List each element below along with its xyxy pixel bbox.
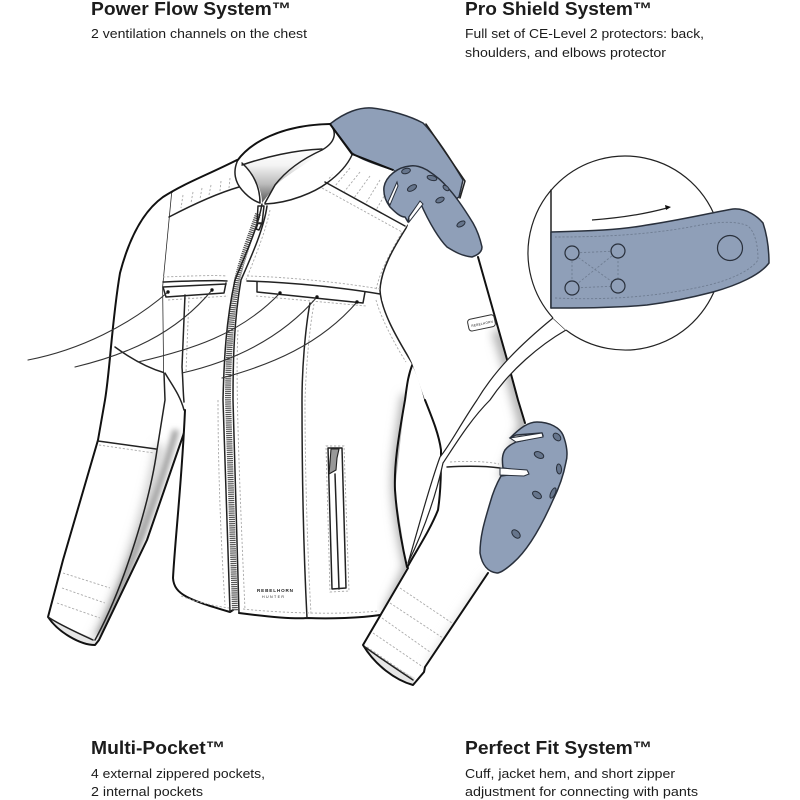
- lower pocket: [326, 446, 349, 592]
- feature: Perfect Fit System: [465, 738, 699, 799]
- feature: Multi-Pocket: 4 external zippered pockets,: [91, 766, 265, 781]
- illustration: jacket: [28, 108, 769, 685]
- callout pointer: [408, 318, 566, 563]
- yoke: [169, 187, 239, 217]
- feature: Pro Shield System: Full set of CE-Level 2 protectors: back,: [465, 26, 704, 41]
- zoom callout: [408, 156, 769, 563]
- feature: Multi-Pocket: [91, 738, 265, 799]
- elbow protector: [480, 422, 567, 573]
- chest seam: [163, 276, 380, 289]
- feature: Perfect Fit System: adjustment for connecting with pants: [465, 784, 699, 799]
- arm label: [467, 314, 496, 332]
- feature: Multi-Pocket: 2 internal pockets: [91, 784, 204, 799]
- collar: [235, 124, 393, 204]
- arrow: strap direction: [592, 205, 671, 220]
- panel seams: [182, 295, 310, 618]
- strap detail: [551, 209, 769, 308]
- feature: Perfect Fit System: Cuff, jacket hem, and short zipper: [465, 766, 676, 781]
- right sleeve: [363, 170, 525, 685]
- feature: Power Flow System: [91, 0, 307, 41]
- main zipper: [218, 204, 270, 613]
- shoulder protector: [384, 166, 482, 257]
- feature: Perfect Fit System: Perfect Fit System™: [465, 738, 652, 758]
- brand mark: HUNTER: [262, 595, 284, 599]
- feature: Pro Shield System: shoulders, and elbows protector: [465, 45, 667, 60]
- jacket left sleeve: [48, 160, 237, 645]
- feature: Multi-Pocket: Multi-Pocket™: [91, 738, 225, 758]
- airflow lines: [28, 288, 359, 378]
- callout circle: [528, 156, 722, 350]
- chest pockets: [163, 282, 366, 306]
- arm label: REBELHORN: [471, 319, 494, 328]
- jacket body: [163, 155, 425, 618]
- feature: Pro Shield System: [465, 0, 704, 60]
- brand mark: [257, 588, 294, 599]
- feature: Power Flow System: 2 ventilation channels on the chest: [91, 26, 307, 41]
- back protector: [330, 108, 465, 210]
- brand mark: REBELHORN: [257, 588, 294, 593]
